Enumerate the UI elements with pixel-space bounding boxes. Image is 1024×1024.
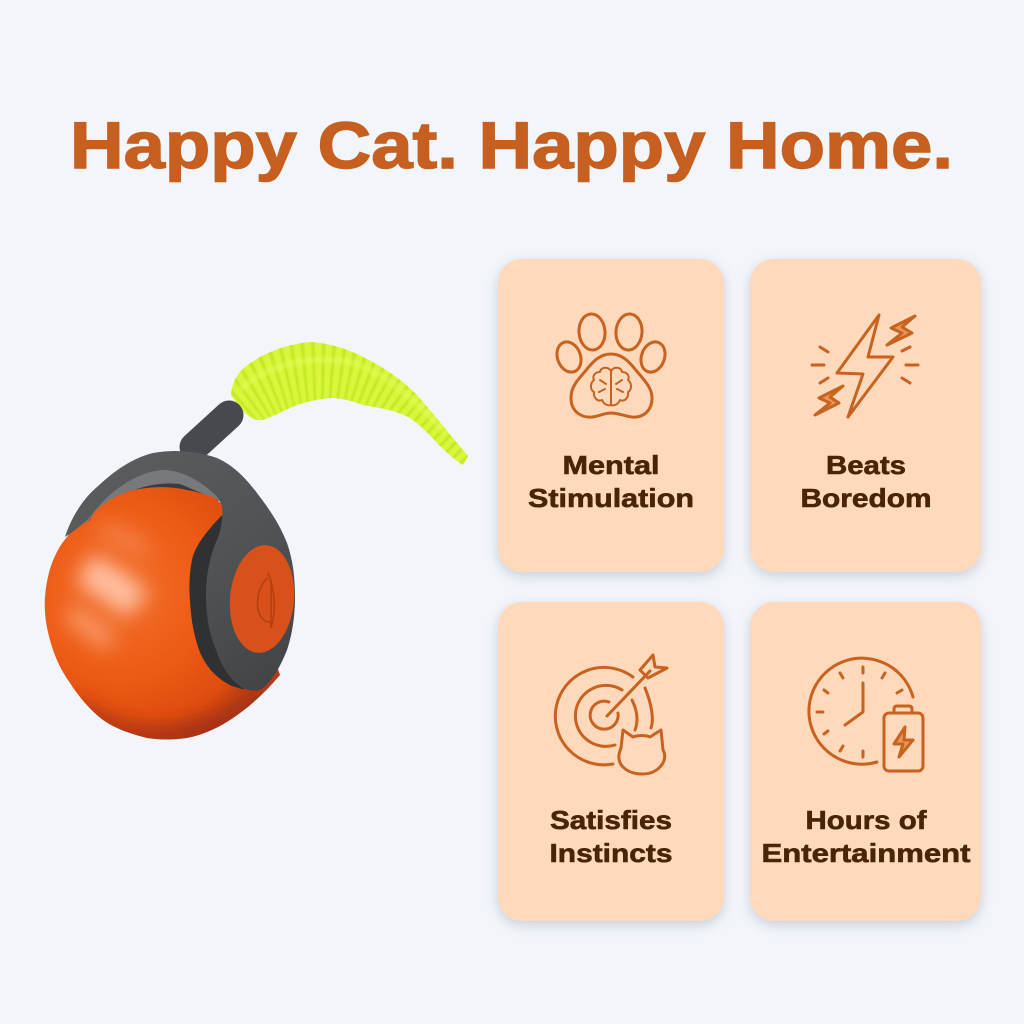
panel: beats boredom [750, 259, 981, 572]
label: hours of entertainment [762, 805, 971, 868]
label: mental stimulation: Mental [562, 450, 660, 480]
label: hours of entertainment: Hours of [806, 805, 927, 835]
icon: clock with battery [809, 658, 923, 771]
icon: target with arrow and cat [555, 655, 667, 774]
label: hours of entertainment: Entertainment [762, 838, 971, 868]
label: mental stimulation [528, 450, 694, 513]
yellow-green tail [231, 342, 468, 465]
icon: paw with brain [553, 313, 669, 417]
panel: hours of entertainment [750, 602, 981, 921]
dark gap above ball [80, 483, 218, 530]
label: satisfies instincts: Satisfies [550, 805, 672, 835]
orange ball [45, 487, 285, 740]
label: mental stimulation: Stimulation [528, 483, 694, 513]
orange side button [225, 542, 299, 656]
product: cat toy ball with wiggly tail [45, 342, 468, 740]
panel: satisfies instincts [498, 602, 724, 921]
panel: mental stimulation [498, 259, 724, 572]
title: Happy Cat. Happy Home. [70, 108, 953, 182]
label: beats boredom [800, 450, 932, 513]
inner grey ring track [66, 462, 222, 540]
label: satisfies instincts [550, 805, 672, 868]
icon: lightning bolts [812, 315, 918, 417]
label: beats boredom: Boredom [800, 483, 932, 513]
grey stem [194, 415, 229, 447]
label: satisfies instincts: Instincts [550, 838, 672, 868]
grey ring housing [65, 451, 295, 691]
label: beats boredom: Beats [826, 450, 906, 480]
dark inner recess of ring [189, 515, 245, 690]
